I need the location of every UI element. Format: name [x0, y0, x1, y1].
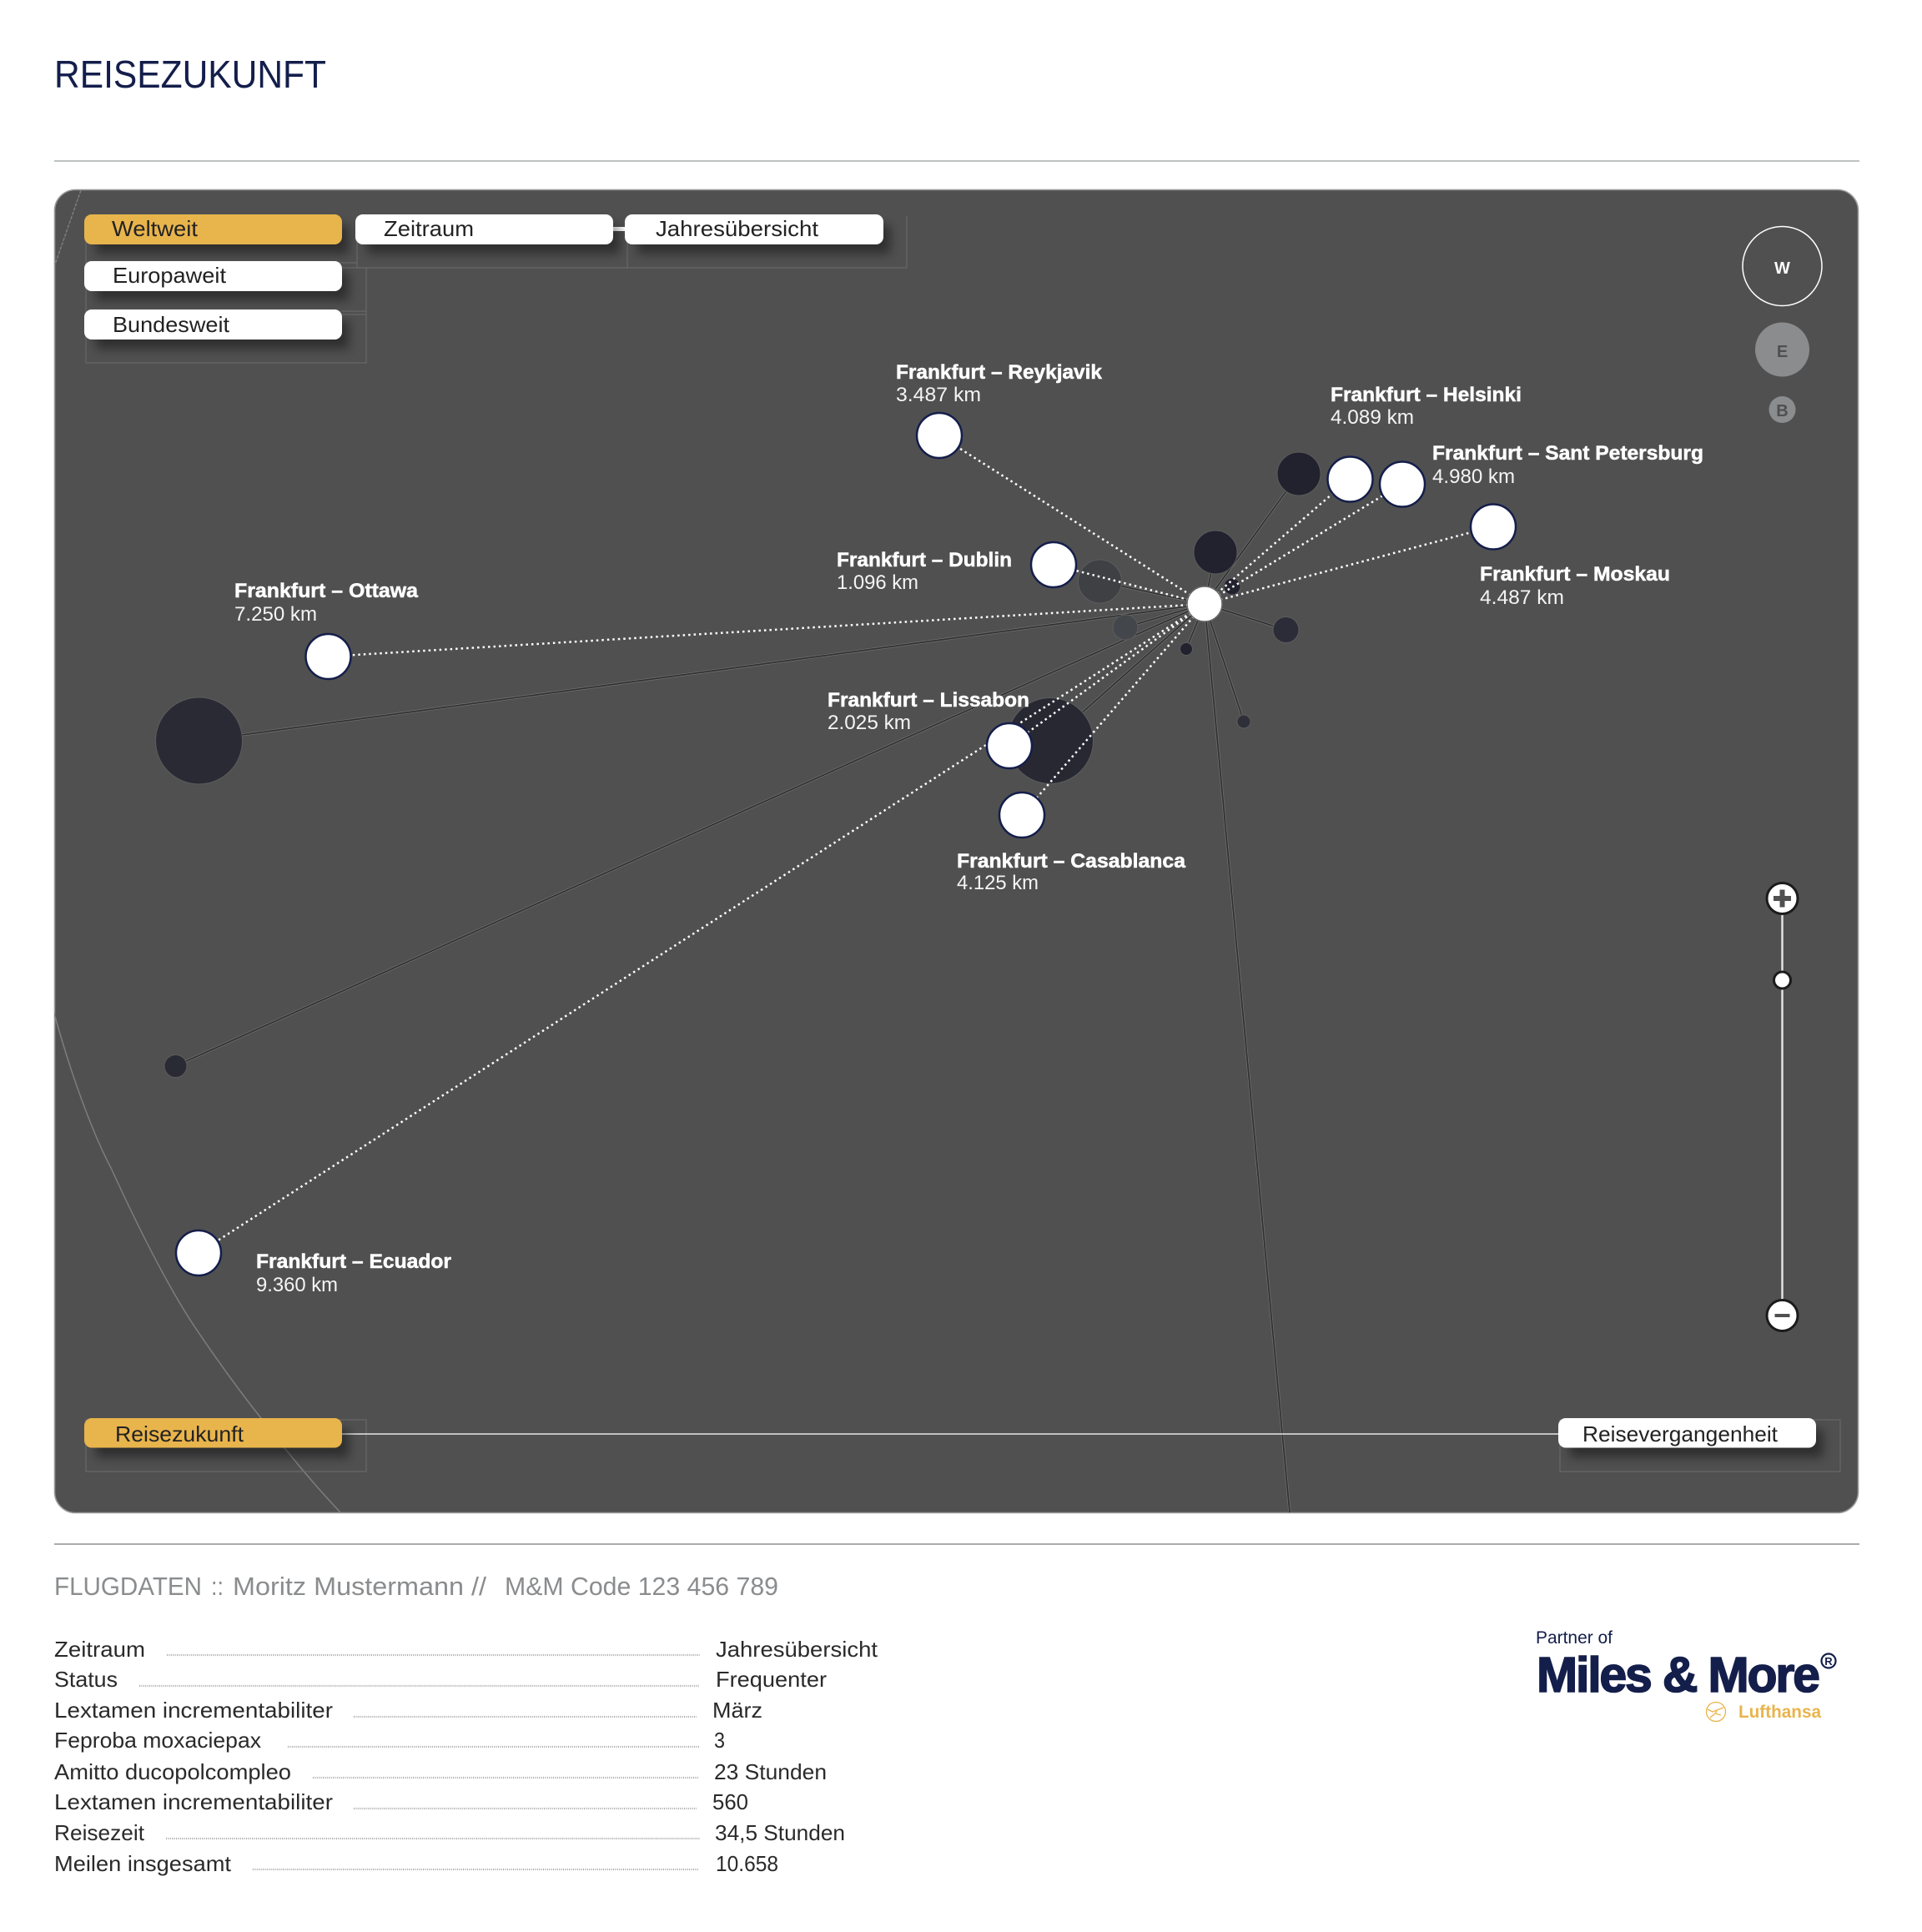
- button: Reisezukunft: [84, 1418, 349, 1457]
- row: Lextamen incrementabiliter 2: Lextamen incrementabiliter: [54, 1789, 333, 1814]
- heading: Flugdaten: FLUGDATEN: [54, 1572, 202, 1601]
- label: Ecuador: [256, 1250, 451, 1296]
- row: Meilen insgesamt: Meilen insgesamt: [54, 1851, 232, 1876]
- row: Status: [54, 1667, 827, 1692]
- row: Lextamen incrementabiliter: März: [712, 1698, 762, 1723]
- row: Amitto ducopolcompleo: 23 Stunden: [714, 1759, 827, 1784]
- heading: Flugdaten: ::: [211, 1572, 224, 1601]
- button: Bundesweit: [84, 309, 349, 349]
- label: Ottawa: [234, 580, 419, 626]
- icon: Lufthansa crane: [1707, 1702, 1725, 1722]
- heading: Flugdaten: Moritz Mustermann: [233, 1572, 464, 1601]
- button: Zeitraum: [355, 214, 620, 254]
- label: Helsinki: 4.089 km: [1331, 406, 1414, 429]
- row: Reisezeit: 34,5 Stunden: [715, 1820, 845, 1845]
- level selector: W: W: [1774, 259, 1790, 278]
- label: Moskau: [1480, 563, 1670, 609]
- menu outline boxes: [86, 216, 1840, 1472]
- logo: Miles & More: Miles & More: [1537, 1648, 1820, 1703]
- label: Casablanca: Frankfurt – Casablanca: [957, 850, 1186, 873]
- label: Ottawa: Frankfurt – Ottawa: [234, 580, 419, 602]
- row: Lextamen incrementabiliter 2: 560: [712, 1789, 748, 1814]
- button: Reisevergangenheit: [1558, 1418, 1823, 1457]
- row: Feproba moxaciepax: [54, 1728, 725, 1753]
- label: Reykjavik: 3.487 km: [896, 384, 981, 406]
- connector: Zeitraum to Jahresübersicht: [612, 227, 626, 231]
- button: Europaweit: [84, 261, 349, 300]
- label: Lissabon: [828, 689, 1029, 734]
- button: Reisezukunft: Reisezukunft: [115, 1421, 244, 1446]
- label: Casablanca: 4.125 km: [957, 872, 1039, 894]
- label: Casablanca: [957, 850, 1186, 894]
- level selector: B: [1769, 396, 1795, 423]
- row: Feproba moxaciepax: 3: [714, 1728, 725, 1753]
- connector: Reisezukunft to Reisevergangenheit: [342, 1433, 1558, 1435]
- label: Sant Petersburg: 4.980 km: [1432, 465, 1515, 488]
- future destination circles: [176, 413, 1516, 1275]
- label: Lissabon: 2.025 km: [828, 712, 911, 734]
- logo: Miles & More: [1536, 1628, 1835, 1722]
- button: Jahresübersicht: [625, 214, 890, 254]
- dotted lines: future routes: [199, 435, 1493, 1253]
- row: Meilen insgesamt: 10.658: [716, 1851, 778, 1876]
- row: Zeitraum: Jahresübersicht: [716, 1637, 878, 1662]
- row: Zeitraum: Zeitraum: [54, 1637, 145, 1662]
- row: Lextamen incrementabiliter: Lextamen incrementabiliter: [54, 1698, 333, 1723]
- zoom slider: [1767, 883, 1798, 1331]
- level selector: W: [1743, 227, 1822, 305]
- label: Dublin: Frankfurt – Dublin: [837, 549, 1012, 571]
- row: Reisezeit: Reisezeit: [54, 1820, 145, 1845]
- button: Jahresübersicht: Jahresübersicht: [656, 216, 819, 241]
- label: Sant Petersburg: Frankfurt – Sant Petersburg: [1432, 442, 1703, 465]
- heading: Flugdaten: [54, 1572, 778, 1601]
- title: REISEZUKUNFT: [54, 53, 326, 96]
- panel: route map: [54, 190, 1859, 1513]
- row: Status: Status: [54, 1667, 118, 1692]
- label: Moskau: Frankfurt – Moskau: [1480, 563, 1670, 586]
- past destination circles: [155, 452, 1321, 1078]
- heading: Flugdaten: //: [471, 1572, 486, 1601]
- button: Zeitraum: Zeitraum: [384, 216, 474, 241]
- label: Ecuador: 9.360 km: [256, 1274, 338, 1296]
- label: Reykjavik: Frankfurt – Reykjavik: [896, 361, 1103, 384]
- logo: Miles & More: R: [1824, 1655, 1833, 1668]
- row: Lextamen incrementabiliter: [54, 1698, 762, 1723]
- logo: Miles & More: Lufthansa: [1738, 1703, 1821, 1722]
- label: Ecuador: Frankfurt – Ecuador: [256, 1250, 451, 1273]
- row: Meilen insgesamt: [54, 1851, 778, 1876]
- row: Lextamen incrementabiliter 2: [54, 1789, 748, 1814]
- button: Reisevergangenheit: Reisevergangenheit: [1582, 1421, 1779, 1446]
- level selector: E: E: [1777, 343, 1788, 361]
- row: Status: Frequenter: [716, 1667, 827, 1692]
- label: Helsinki: Frankfurt – Helsinki: [1331, 384, 1522, 406]
- label: Dublin: 1.096 km: [837, 571, 918, 594]
- heading: Flugdaten: M&M Code 123 456 789: [505, 1572, 778, 1601]
- row: Reisezeit: [54, 1820, 845, 1845]
- label: Ottawa: 7.250 km: [234, 603, 317, 626]
- flight data table: [54, 1637, 878, 1876]
- button: Weltweit: Weltweit: [112, 216, 199, 241]
- label: Moskau: 4.487 km: [1480, 586, 1564, 609]
- button: Europaweit: Europaweit: [113, 263, 227, 288]
- label: Sant Petersburg: [1432, 442, 1703, 488]
- row: Amitto ducopolcompleo: Amitto ducopolcompleo: [54, 1759, 291, 1784]
- connection lines: past routes: [175, 474, 1299, 1512]
- row: Amitto ducopolcompleo: [54, 1759, 827, 1784]
- globe outline arc: [54, 190, 340, 1512]
- logo: Miles & More: Partner of: [1536, 1628, 1613, 1648]
- row: Feproba moxaciepax: Feproba moxaciepax: [54, 1728, 261, 1753]
- button: Weltweit: [84, 214, 349, 254]
- label: Lissabon: Frankfurt – Lissabon: [828, 689, 1029, 712]
- label: Reykjavik: [896, 361, 1103, 406]
- button: Bundesweit: Bundesweit: [113, 312, 230, 337]
- level selector: B: B: [1776, 402, 1789, 420]
- label: Helsinki: [1331, 384, 1522, 429]
- origin: Frankfurt: [1187, 586, 1222, 621]
- row: Zeitraum: [54, 1637, 878, 1662]
- label: Dublin: [837, 549, 1012, 594]
- level selector: E: [1755, 322, 1809, 377]
